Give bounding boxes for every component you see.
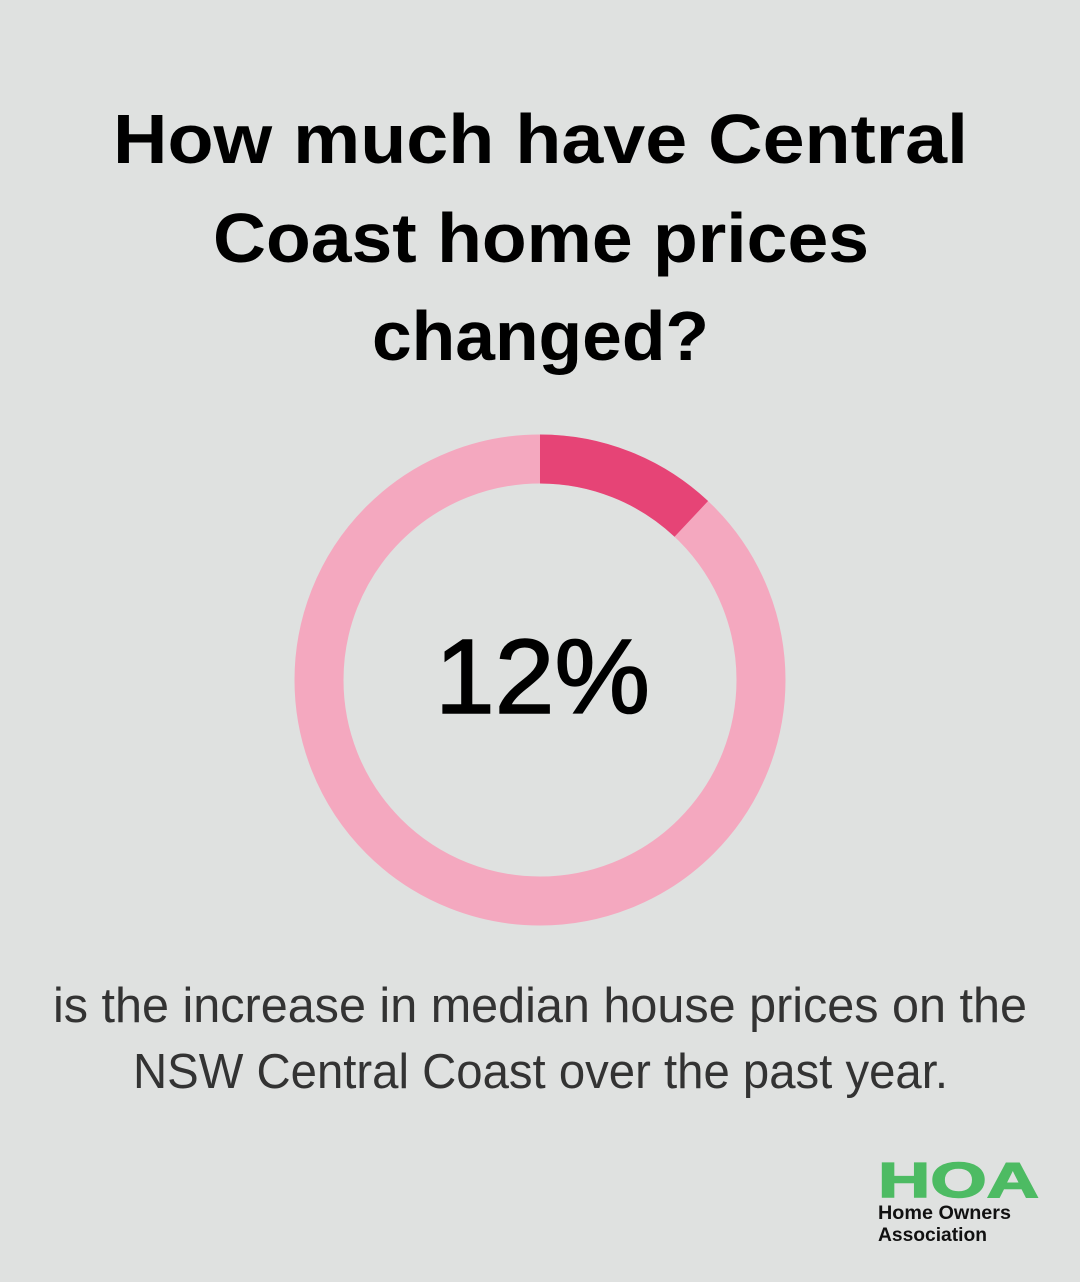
- logo mark: HOA letters: HOA: [878, 1154, 1039, 1208]
- logo: HOA Home Owners Association: [878, 1154, 1039, 1246]
- title: How much have Central: [113, 100, 968, 178]
- title: changed?: [372, 297, 709, 375]
- title: Coast home prices: [213, 199, 869, 277]
- logo text: [878, 1202, 1011, 1246]
- title: [113, 100, 968, 375]
- donut chart: 12%: [319, 459, 761, 901]
- description text: [53, 979, 1027, 1099]
- statistic value: 12%: [435, 618, 650, 736]
- logo text: Association: [878, 1224, 987, 1246]
- description text: NSW Central Coast over the past year.: [133, 1045, 948, 1099]
- description text: is the increase in median house prices on the: [53, 979, 1027, 1033]
- logo text: Home Owners: [878, 1202, 1011, 1224]
